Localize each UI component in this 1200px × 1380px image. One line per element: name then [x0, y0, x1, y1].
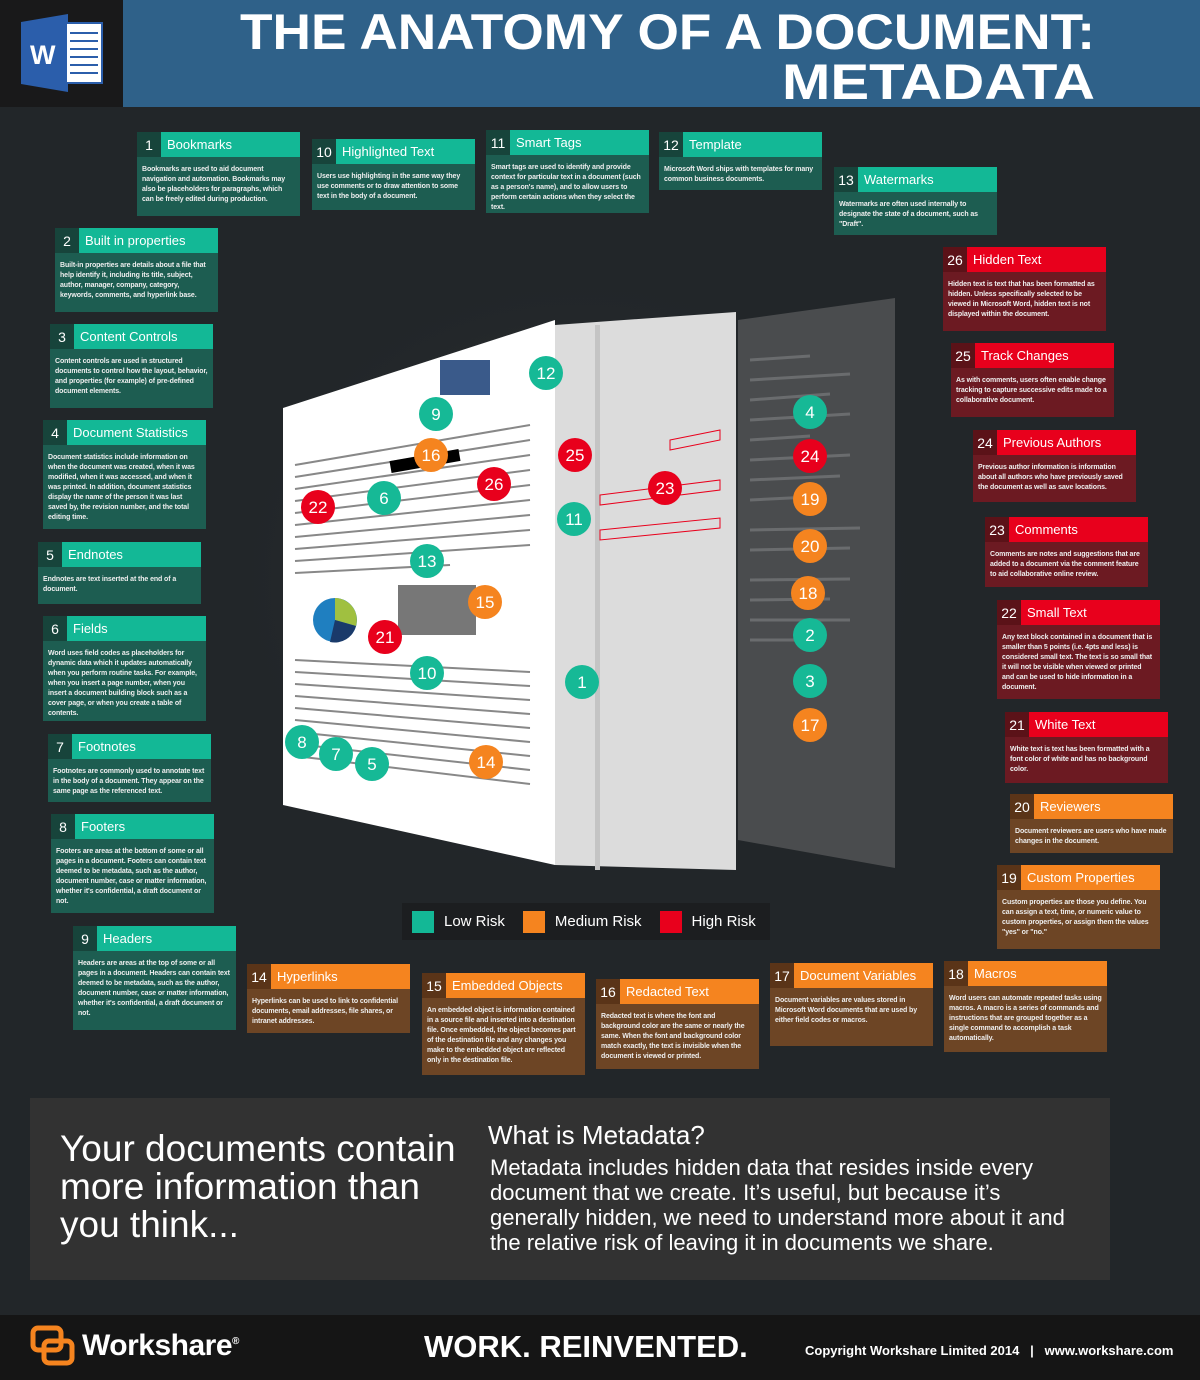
- card 22: Small Text: [1027, 605, 1087, 620]
- card 19: [997, 865, 1160, 949]
- card 8: [51, 814, 214, 913]
- header bar: [0, 0, 1200, 107]
- card 26: Hidden Text: [973, 252, 1041, 267]
- card 24: Previous author information is information about all authors who have previously saved the document as well as save locations.: [978, 464, 1123, 491]
- card 2: [55, 228, 218, 312]
- markers: 17: [801, 716, 819, 735]
- card 17: Document Variables: [800, 968, 916, 983]
- card 4: Document Statistics: [73, 425, 188, 440]
- card 13: 13: [838, 172, 854, 188]
- legend: High Risk: [692, 913, 756, 930]
- markers: 15: [476, 593, 494, 612]
- legend: [402, 903, 770, 940]
- markers: 5: [367, 755, 377, 774]
- card 6: Fields: [73, 621, 108, 636]
- card 10: [312, 139, 475, 210]
- card 16: 16: [600, 984, 616, 1000]
- card 22: Any text block contained in a document that is smaller than 5 points (i.e. 4pts and less) is considered small text. The text is so small that it will not be visible when viewed or printed and can be used to hide information in a document.: [1002, 634, 1152, 691]
- card 26: 26: [947, 252, 963, 268]
- card 15: Embedded Objects: [452, 978, 563, 993]
- card 10: Users use highlighting in the same way they use comments or to draw attention to some text in the body of a document.: [317, 173, 460, 200]
- card 11: Smart tags are used to identify and provide context for particular text in a document (such as a person's name), and to allow users to perform certain actions when they select the text.: [491, 164, 641, 211]
- card 16: Redacted Text: [626, 984, 709, 999]
- card 1: 1: [145, 136, 153, 152]
- slogan: WORK. REINVENTED.: [424, 1329, 748, 1364]
- card 16: Redacted text is where the font and background color are the same or nearly the same. When the font and background color match exactly, the text is invisible when the document is viewed or printed.: [601, 1013, 745, 1060]
- markers: 14: [477, 753, 495, 772]
- card 7: 7: [56, 738, 64, 754]
- card 17: 17: [774, 968, 790, 984]
- icon: word logo: [0, 0, 123, 107]
- markers: 13: [418, 552, 436, 571]
- bottom panel: [30, 1098, 1110, 1280]
- card 20: Document reviewers are users who have made changes in the document.: [1015, 828, 1166, 845]
- card 3: Content Controls: [80, 329, 178, 344]
- card 18: Macros: [974, 966, 1017, 981]
- card 3: [50, 324, 213, 408]
- card 12: Template: [689, 137, 742, 152]
- card 6: [43, 616, 206, 721]
- card 25: Track Changes: [981, 348, 1069, 363]
- card 9: Headers are areas at the top of some or all pages in a document. Headers can contain text deemed to be metadata, such as the author, document number, case or matter information, whether it's confidential, a draft document or not.: [78, 960, 230, 1017]
- card 13: [834, 167, 997, 235]
- card 6: Word uses field codes as placeholders for dynamic data which it updates automatically when you perform routine tasks. For example, when you insert a page number, when you insert a document building block such as a cover page, or when you create a table of contents.: [48, 650, 197, 717]
- card 14: [247, 964, 410, 1033]
- card 3: 3: [58, 328, 66, 344]
- card 18: Word users can automate repeated tasks using macros. A macro is a series of commands and instructions that are grouped together as a single command to accomplish a task automatically.: [949, 995, 1102, 1042]
- card 8: Footers: [81, 819, 125, 834]
- card 20: Reviewers: [1040, 799, 1101, 814]
- tagline: Your documents contain more information than you think...: [60, 1128, 456, 1245]
- card 7: Footnotes are commonly used to annotate text in the body of a document. They appear on the same page as the referenced text.: [53, 768, 204, 795]
- card 20: 20: [1014, 798, 1030, 814]
- card 15: 15: [426, 978, 442, 994]
- card 14: 14: [251, 968, 267, 984]
- card 24: Previous Authors: [1003, 435, 1101, 450]
- card 21: [1005, 712, 1168, 783]
- markers: 11: [565, 510, 583, 529]
- card 15: [422, 973, 585, 1075]
- card 10: 10: [316, 144, 332, 160]
- card 23: [985, 517, 1148, 587]
- title: THE ANATOMY OF A DOCUMENT:: [240, 4, 1095, 60]
- workshare logo: [30, 1326, 240, 1366]
- card 23: Comments: [1015, 522, 1078, 537]
- markers: 21: [376, 628, 394, 647]
- card 24: 24: [977, 434, 993, 450]
- card 9: Headers: [103, 931, 152, 946]
- markers: 9: [431, 405, 441, 424]
- what is metadata: What is Metadata?: [488, 1120, 705, 1150]
- card 6: 6: [51, 620, 59, 636]
- card 21: White text is text has been formatted with a font color of white and has no background color.: [1010, 746, 1150, 773]
- card 17: Document variables are values stored in Microsoft Word documents that are used by either field codes or macros.: [775, 997, 917, 1024]
- card 11: Smart Tags: [516, 135, 582, 150]
- markers: 6: [379, 489, 389, 508]
- card 25: [951, 343, 1114, 417]
- card 7: [48, 734, 211, 802]
- card 24: [973, 430, 1136, 502]
- card 2: 2: [63, 232, 71, 248]
- card 5: [38, 542, 201, 604]
- card 19: Custom properties are those you define. You can assign a text, time, or numeric value to custom properties, or assign them the values "yes" or "no.": [1002, 899, 1149, 936]
- card 4: 4: [51, 424, 59, 440]
- center graphic: document pages: [283, 298, 895, 870]
- card 5: Endnotes are text inserted at the end of a document.: [43, 576, 176, 593]
- legend: Low Risk: [444, 913, 505, 930]
- markers: 8: [297, 733, 307, 752]
- card 18: [944, 961, 1107, 1052]
- title: [123, 0, 1200, 107]
- markers: 26: [485, 475, 503, 494]
- card 3: Content controls are used in structured documents to control how the layout, behavior, and properties (for example) of pre-defined document elements.: [55, 358, 208, 395]
- card 4: Document statistics include information on when the document was created, when it was modified, when it was accessed, and when it was printed. In addition, document statistics display the name of the person it was last saved by, the revision number, and the total editing time.: [48, 454, 195, 521]
- card 20: [1010, 794, 1173, 853]
- card 13: Watermarks: [864, 172, 934, 187]
- markers: 2: [805, 626, 815, 645]
- card 26: Hidden text is text that has been formatted as hidden. Unless specifically selected to be viewed in Microsoft Word, hidden text is not displayed within the document.: [948, 281, 1095, 318]
- markers: 19: [801, 490, 819, 509]
- card 9: [73, 926, 236, 1030]
- card 11: 11: [491, 134, 505, 150]
- card 21: 21: [1009, 716, 1025, 732]
- footer: [0, 1315, 1200, 1380]
- card 5: 5: [46, 546, 54, 562]
- workshare logo: Workshare®: [82, 1329, 239, 1362]
- card 14: Hyperlinks can be used to link to confidential documents, email addresses, file shares, or intranet addresses.: [252, 998, 398, 1025]
- markers: 7: [331, 745, 341, 764]
- markers: 22: [309, 498, 327, 517]
- card 9: 9: [81, 930, 89, 946]
- what is metadata: Metadata includes hidden data that resides inside every document that we create. It’s useful, but because it’s generally hidden, we need to understand more about it and the relative risk of leaving it in documents we share.: [490, 1155, 1065, 1255]
- copyright: Copyright Workshare Limited 2014 | www.workshare.com: [805, 1343, 1173, 1358]
- card 1: [137, 132, 300, 216]
- card 7: Footnotes: [78, 739, 136, 754]
- icon: word logo: W: [30, 40, 56, 70]
- markers: 1: [577, 673, 587, 692]
- card 10: Highlighted Text: [342, 144, 434, 159]
- card 21: White Text: [1035, 717, 1095, 732]
- card 12: 12: [663, 136, 679, 152]
- markers: 25: [566, 446, 584, 465]
- card 2: Built-in properties are details about a file that help identify it, including its title, subject, author, manager, company, category, keywords, comments, and hyperlink base.: [60, 262, 206, 299]
- card 14: Hyperlinks: [277, 969, 338, 984]
- card 1: Bookmarks are used to aid document navigation and automation. Bookmarks may also be placeholders for paragraphs, which can be freely edited during production.: [142, 166, 285, 203]
- card 11: [486, 130, 649, 213]
- card 19: 19: [1001, 870, 1017, 886]
- card 4: [43, 420, 206, 529]
- markers: 23: [656, 479, 674, 498]
- card 23: Comments are notes and suggestions that are added to a document via the comment feature to aid collaborative online review.: [990, 551, 1140, 578]
- card 5: Endnotes: [68, 547, 123, 562]
- card 8: Footers are areas at the bottom of some or all pages in a document. Footers can contain text deemed to be metadata, such as the author, document number, case or matter information, whether it's confidential, a draft document or not.: [56, 848, 206, 905]
- card 13: Watermarks are often used internally to designate the state of a document, such as "Draft".: [839, 201, 978, 228]
- markers: 12: [537, 364, 555, 383]
- card 15: An embedded object is information contained in a source file and inserted into a destination file. Once embedded, the object becomes part of the destination file and any changes you make to the embedded object are reflected only in the destination file.: [427, 1007, 575, 1064]
- markers: 10: [418, 664, 436, 683]
- card 26: [943, 247, 1106, 331]
- card 12: [659, 132, 822, 190]
- card 1: Bookmarks: [167, 137, 232, 152]
- markers: [285, 356, 827, 781]
- card 12: Microsoft Word ships with templates for many common business documents.: [664, 166, 813, 183]
- card 23: 23: [989, 522, 1005, 538]
- markers: 4: [805, 403, 815, 422]
- card 25: 25: [955, 348, 971, 364]
- card 22: 22: [1001, 604, 1017, 620]
- card 25: As with comments, users often enable change tracking to capture successive edits made to a collaborative document.: [956, 377, 1107, 404]
- card 17: [770, 963, 933, 1046]
- card 22: [997, 600, 1160, 699]
- markers: 3: [805, 672, 815, 691]
- markers: 18: [799, 584, 817, 603]
- card 18: 18: [948, 966, 964, 982]
- markers: 24: [801, 447, 819, 466]
- card 16: [596, 979, 759, 1069]
- markers: 20: [801, 537, 819, 556]
- markers: 16: [422, 446, 440, 465]
- card 2: Built in properties: [85, 233, 185, 248]
- card 8: 8: [59, 818, 67, 834]
- legend: Medium Risk: [555, 913, 642, 930]
- card 19: Custom Properties: [1027, 870, 1135, 885]
